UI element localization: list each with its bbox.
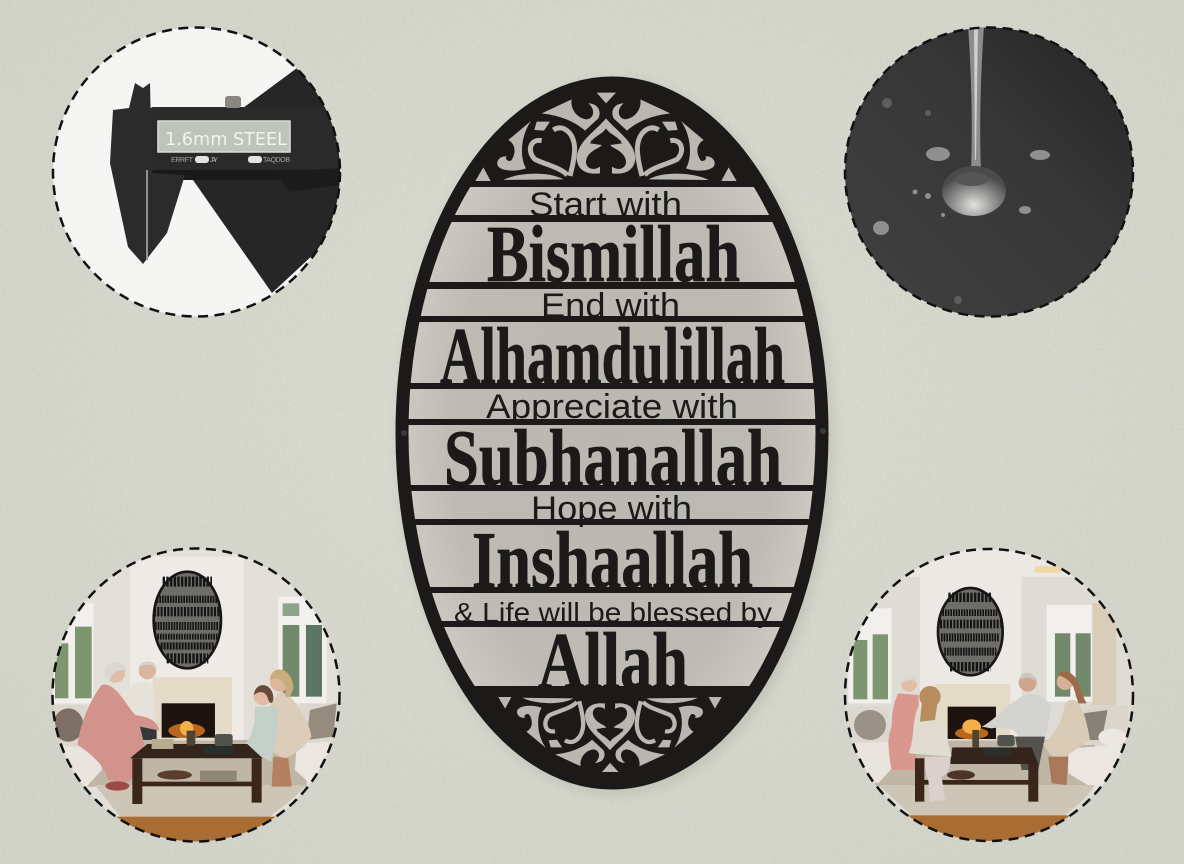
text: End with: End with bbox=[541, 287, 680, 325]
button labels bbox=[171, 157, 290, 164]
chimney wall bbox=[130, 557, 243, 743]
text: Bismillah: Bismillah bbox=[487, 211, 740, 299]
rug bbox=[878, 785, 1095, 815]
wood floor bbox=[898, 815, 1078, 845]
mounting screws bbox=[401, 428, 826, 436]
coffee table bbox=[915, 730, 1038, 802]
left window bbox=[848, 608, 892, 703]
adjustment knob bbox=[225, 96, 241, 108]
display reading: 1.6mm STEEL bbox=[165, 129, 287, 150]
panel: family living room, right bbox=[844, 548, 1134, 842]
panel: oval metal wall art bbox=[396, 60, 834, 796]
steel sheet bbox=[193, 68, 345, 293]
top ornament bbox=[475, 93, 737, 181]
little girl bbox=[245, 685, 278, 762]
text: Alhamdulillah: Alhamdulillah bbox=[440, 313, 785, 401]
woman on right bbox=[270, 670, 312, 787]
left sofa bbox=[50, 705, 102, 787]
right sofa bbox=[1068, 705, 1128, 792]
rug bbox=[95, 785, 307, 817]
ceiling light bbox=[1035, 566, 1061, 573]
caliper jaw bbox=[110, 83, 185, 264]
panel: family living room, left bbox=[51, 547, 341, 843]
mini oval wall art bbox=[154, 572, 221, 668]
thumb wheel bbox=[275, 168, 340, 192]
oval ring bbox=[402, 83, 822, 783]
floor area bbox=[875, 740, 1095, 787]
fireplace bbox=[153, 677, 232, 741]
button labels: ERRFT bbox=[171, 157, 194, 164]
panel: caliper 1.6mm steel detail bbox=[50, 25, 345, 320]
caliper buttons bbox=[195, 156, 209, 163]
girl from behind bbox=[908, 686, 952, 802]
oval inner background bbox=[402, 83, 822, 783]
small droplets bbox=[873, 98, 1050, 304]
digital display bbox=[158, 121, 290, 152]
grandmother in pink bbox=[889, 675, 919, 770]
text: Allah: Allah bbox=[538, 618, 688, 706]
left window bbox=[50, 603, 93, 703]
wood floor bbox=[116, 816, 276, 842]
text: and Life will be blessed by: & Life will be blessed by bbox=[454, 597, 772, 628]
panel: water droplet on slate bbox=[840, 22, 1140, 322]
curtain bbox=[1092, 603, 1116, 707]
caliper body bbox=[150, 107, 345, 170]
left sofa bbox=[845, 707, 893, 783]
floor area bbox=[87, 740, 307, 787]
text: Subhanallah: Subhanallah bbox=[444, 415, 782, 503]
grandmother in pink bbox=[78, 663, 159, 791]
right window bbox=[1047, 605, 1093, 702]
bottom ornament bbox=[498, 697, 722, 772]
chimney wall bbox=[920, 575, 1022, 742]
text: Start with: Start with bbox=[529, 186, 682, 224]
water stream bbox=[968, 25, 984, 172]
text: Inshaallah: Inshaallah bbox=[472, 517, 753, 605]
ceiling bbox=[905, 549, 1072, 576]
man behind sofa bbox=[130, 662, 157, 740]
woman on right bbox=[1043, 671, 1090, 785]
button labels: JAY bbox=[210, 157, 218, 164]
text: Hope with: Hope with bbox=[531, 490, 692, 528]
right sofa bbox=[295, 703, 340, 783]
man in shirt bbox=[982, 673, 1052, 770]
right window bbox=[278, 597, 327, 703]
main droplet bbox=[942, 166, 1006, 216]
button labels: TAQDOB bbox=[263, 157, 290, 164]
horizontal bars bbox=[408, 90, 816, 776]
fireplace bbox=[935, 684, 1010, 741]
mini oval wall art bbox=[938, 588, 1003, 675]
coffee table bbox=[130, 731, 263, 804]
text: Appreciate with: Appreciate with bbox=[486, 388, 738, 426]
